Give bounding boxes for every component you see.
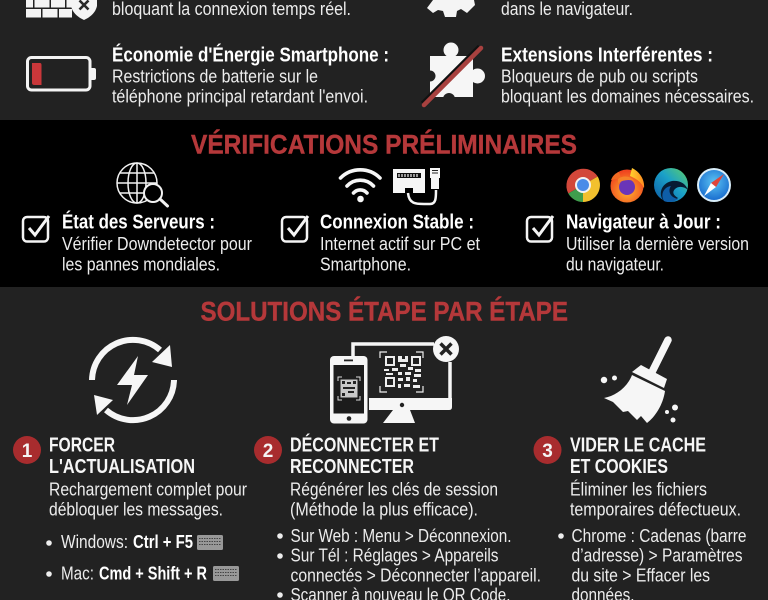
step 2 list bbox=[277, 526, 541, 600]
panel: causes bbox=[26, 0, 754, 106]
badge: number 2: 2 bbox=[263, 441, 273, 462]
icon: firewall with shield bbox=[26, 0, 97, 20]
step 1 shortcut: windows bbox=[46, 532, 223, 552]
block: interfering extensions: Bloqueurs de pub ou scripts bbox=[501, 66, 698, 86]
check item: stable connection: Internet actif sur PC et bbox=[320, 234, 480, 254]
step 2 description: (Méthode la plus efficace). bbox=[290, 500, 478, 520]
check item: server status: Vérifier Downdetector pour bbox=[62, 234, 252, 254]
icon: refresh with lightning bolt bbox=[92, 340, 174, 420]
step 2 title: RECONNECTER bbox=[290, 456, 414, 478]
panel: step 2 bbox=[254, 336, 541, 600]
step 3 title bbox=[570, 434, 706, 478]
badge: number 3: 3 bbox=[542, 441, 553, 462]
icon: phone and monitor with QR code bbox=[330, 336, 459, 424]
step 2 list: Sur Tél : Réglages > Appareils bbox=[290, 546, 498, 566]
badge: number 1 bbox=[13, 436, 41, 464]
step 3 description: Éliminer les fichiers bbox=[570, 480, 707, 500]
block: battery saving bbox=[112, 44, 389, 106]
icon: chrome bbox=[566, 169, 600, 202]
panel: step 3 bbox=[534, 340, 746, 600]
step 3 title: ET COOKIES bbox=[570, 456, 668, 478]
icon: broom bbox=[601, 340, 678, 423]
step 1 shortcut: windows: Windows: bbox=[61, 532, 128, 552]
step 2 title bbox=[290, 434, 439, 478]
step 1 shortcut: mac: Mac: bbox=[61, 564, 94, 584]
step 3 description: temporaires défectueux. bbox=[570, 500, 741, 520]
check item: updated browser bbox=[527, 212, 749, 274]
badge: number 3 bbox=[534, 436, 562, 464]
icon: edge bbox=[654, 168, 688, 202]
step 2 description: Régénérer les clés de session bbox=[290, 480, 498, 500]
icon: low battery bbox=[28, 58, 96, 90]
step 2 list: connectés > Déconnecter l’appareil. bbox=[290, 566, 541, 586]
icon: crossed-out puzzle piece bbox=[423, 42, 485, 105]
panel: step 1 bbox=[13, 340, 247, 584]
step 1 shortcut: mac bbox=[46, 564, 239, 584]
step 3 list: du site > Effacer les bbox=[572, 566, 710, 586]
check item: stable connection bbox=[282, 212, 480, 274]
step 2 title: DÉCONNECTER ET bbox=[290, 434, 439, 456]
step 3 title: VIDER LE CACHE bbox=[570, 434, 706, 456]
block: interfering extensions bbox=[501, 44, 754, 106]
check item: stable connection: Connexion Stable : bbox=[320, 212, 474, 234]
icon: ethernet port and cable bbox=[393, 168, 440, 204]
step 2 list: Sur Web : Menu > Déconnexion. bbox=[290, 526, 512, 546]
check item: stable connection: Smartphone. bbox=[320, 254, 411, 274]
step 3 list: d’adresse) > Paramètres bbox=[572, 546, 742, 566]
check item: server status: État des Serveurs : bbox=[62, 210, 215, 234]
step 1 title: FORCER bbox=[49, 434, 115, 456]
step 1 shortcut: windows: Ctrl + F5 bbox=[133, 532, 193, 552]
check item: updated browser: Navigateur à Jour : bbox=[566, 212, 721, 234]
icon: globe with magnifier bbox=[117, 163, 168, 206]
icon: gear bbox=[427, 0, 475, 17]
icon: firefox bbox=[610, 168, 644, 202]
block: interfering extensions: Extensions Interférentes : bbox=[501, 44, 713, 66]
check item: server status: les pannes mondiales. bbox=[62, 254, 220, 274]
icon: safari bbox=[697, 168, 731, 202]
step 3 list bbox=[558, 526, 746, 600]
step 1 description: débloquer les messages. bbox=[49, 500, 223, 520]
step 1 description: Rechargement complet pour bbox=[49, 480, 247, 500]
block: battery saving: Restrictions de batterie sur le bbox=[112, 66, 318, 86]
step 1 description bbox=[49, 480, 247, 520]
step 1 title bbox=[49, 434, 195, 478]
heading: step by step solutions: SOLUTIONS ÉTAPE PAR ÉTAPE bbox=[200, 296, 568, 326]
badge: number 1: 1 bbox=[22, 441, 33, 462]
block: battery saving: Économie d'Énergie Smartphone : bbox=[112, 44, 389, 66]
step 1 shortcut: mac: Cmd + Shift + R bbox=[99, 564, 207, 584]
heading: preliminary checks: VÉRIFICATIONS PRÉLIMINAIRES bbox=[191, 128, 577, 160]
block: battery saving: téléphone principal retardant l'envoi. bbox=[112, 86, 368, 106]
check item: updated browser: Utiliser la dernière version bbox=[566, 234, 749, 254]
badge: number 2 bbox=[254, 436, 282, 464]
check item: updated browser: du navigateur. bbox=[566, 254, 664, 274]
step 1 title: L'ACTUALISATION bbox=[49, 456, 195, 478]
step 2 description bbox=[290, 480, 498, 520]
step 3 description bbox=[570, 480, 741, 520]
panel: preliminary checks bbox=[0, 120, 768, 287]
icon: wifi bbox=[340, 170, 380, 202]
check item: server status bbox=[23, 210, 252, 274]
